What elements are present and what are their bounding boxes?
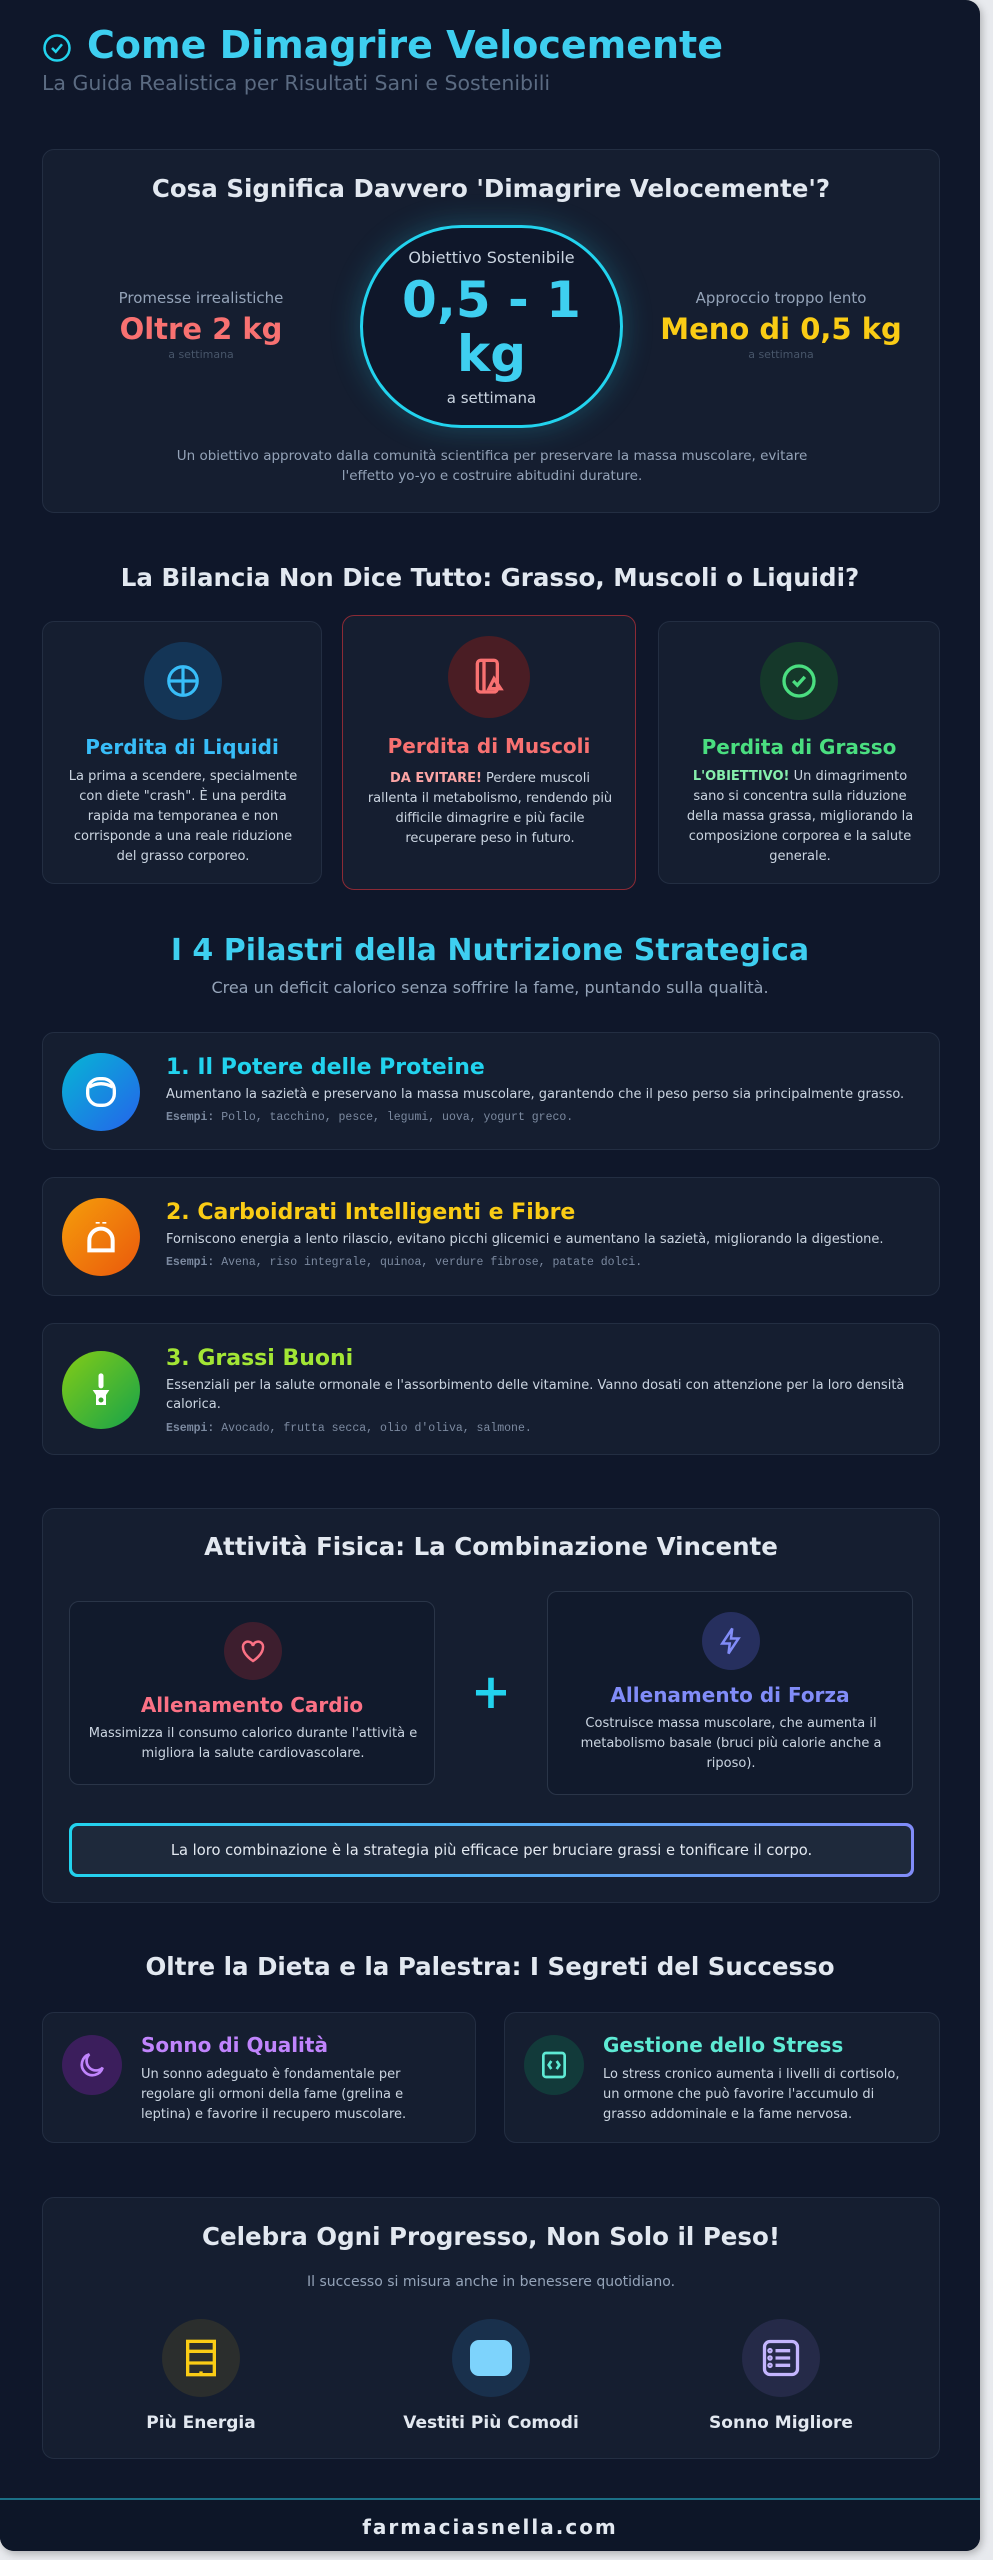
card: stress: Gestione dello Stress: [603, 2033, 843, 2057]
center circle: 0,5 - 1: [402, 271, 581, 329]
panel: celebra: [42, 2197, 940, 2459]
card: proteine: 1. Il Potere delle Proteine: [166, 1055, 485, 1080]
card: liquidi: [42, 621, 322, 884]
card: carboidrati: 2. Carboidrati Intelligenti e Fibre: [166, 1200, 575, 1225]
icon: plus circle: [144, 642, 222, 720]
card: grassi: Essenziali per la salute ormonale e l'assorbimento delle vitamine. Vanno dosati con attenzione per la loro densità calorica.: [166, 1378, 904, 1412]
card: forza: [547, 1591, 913, 1795]
right stat: a settimana: [748, 348, 814, 361]
item: vestiti: [403, 2319, 579, 2433]
icon: egg: [62, 1053, 140, 1131]
card: cardio: Allenamento Cardio: [141, 1693, 363, 1717]
card: muscoli: [342, 615, 636, 890]
icon: bolt: [702, 1612, 760, 1670]
right stat: Meno di 0,5 kg: [660, 312, 902, 346]
card: proteine: [42, 1032, 940, 1150]
panel: obiettivo: [42, 149, 940, 513]
item: vestiti: Vestiti Più Comodi: [403, 2413, 579, 2433]
card: grassi: Esempi: Avocado, frutta secca, olio d'oliva, salmone.: [166, 1422, 532, 1435]
heading: pilastri: I 4 Pilastri della Nutrizione Strategica: [171, 933, 809, 968]
left stat: Promesse irrealistiche: [119, 289, 283, 307]
left stat: [119, 289, 283, 361]
footer: [0, 2498, 980, 2551]
card: grassi: [42, 1323, 940, 1455]
center circle: Obiettivo Sostenibile: [408, 248, 575, 267]
card: cardio: Massimizza il consumo calorico durante l'attività e migliora la salute cardiovascolare.: [89, 1726, 417, 1761]
card: liquidi: Perdita di Liquidi: [85, 735, 279, 759]
card: grasso: Perdita di Grasso: [702, 735, 896, 759]
panel: attività fisica: [42, 1508, 940, 1903]
icon: code: [524, 2035, 584, 2095]
left stat: Oltre 2 kg: [120, 312, 282, 346]
callout: La loro combinazione è la strategia più efficace per bruciare grassi e tonificare il corpo.: [171, 1842, 812, 1858]
card: proteine: Esempi: Pollo, tacchino, pesce, legumi, uova, yogurt greco.: [166, 1111, 573, 1124]
item: sonno: Sonno Migliore: [709, 2413, 853, 2433]
subtitle: pilastri: Crea un deficit calorico senza soffrire la fame, puntando sulla qualità.: [211, 978, 769, 997]
card: proteine: Aumentano la sazietà e preservano la massa muscolare, garantendo che il peso perso sia principalmente grasso.: [166, 1087, 904, 1102]
left stat: a settimana: [168, 348, 234, 361]
subtitle: La Guida Realistica per Risultati Sani e Sostenibili: [42, 71, 550, 95]
card: liquidi: La prima a scendere, specialmente con diete "crash". È una perdita rapida ma temporanea e non corrisponde a una reale riduzione del grasso corporeo.: [69, 769, 297, 864]
right stat: Approccio troppo lento: [696, 289, 866, 307]
card: carboidrati: Forniscono energia a lento rilascio, evitano picchi glicemici e aumentano la sazietà, migliorando la digestione.: [166, 1232, 884, 1247]
card: grassi: 3. Grassi Buoni: [166, 1346, 353, 1371]
heading: Celebra Ogni Progresso, Non Solo il Peso!: [202, 2222, 780, 2251]
icon: phone: [448, 636, 530, 718]
card: forza: Allenamento di Forza: [610, 1683, 850, 1707]
card: muscoli: DA EVITARE! Perdere muscoli rallenta il metabolismo, rendendo più difficile dimagrire e più facile recuperare peso in futuro.: [368, 771, 612, 846]
heading: Attività Fisica: La Combinazione Vincente: [204, 1532, 778, 1561]
footer: farmaciasnella.com: [362, 2515, 618, 2539]
card: sonno: Un sonno adeguato è fondamentale per regolare gli ormoni della fame (grelina e leptina) e favorire il recupero muscolare.: [141, 2067, 406, 2122]
card: sonno: [42, 2012, 476, 2143]
heading: Cosa Significa Davvero 'Dimagrire Velocemente'?: [152, 174, 830, 203]
card: muscoli: Perdita di Muscoli: [388, 734, 590, 758]
card: carboidrati: [42, 1177, 940, 1296]
center circle: kg: [457, 325, 526, 383]
item: energia: Più Energia: [146, 2413, 256, 2433]
card: stress: Lo stress cronico aumenta i livelli di cortisolo, un ormone che può favorire l'accumulo di grasso addominale e la fame nervosa.: [603, 2067, 899, 2122]
center circle: a settimana: [447, 389, 536, 407]
icon: heart: [224, 1622, 282, 1680]
heading: segreti: Oltre la Dieta e la Palestra: I Segreti del Successo: [145, 1952, 835, 1981]
item: energia: [146, 2319, 256, 2433]
note: Un obiettivo approvato dalla comunità scientifica per preservare la massa muscolare, evitare l'effetto yo-yo e costruire abitudini durature.: [177, 448, 807, 484]
center circle: [360, 225, 623, 428]
icon: bottle: [62, 1351, 140, 1429]
icon: check circle: [43, 34, 71, 62]
callout: [69, 1823, 914, 1877]
icon: check: [760, 642, 838, 720]
item: sonno: [709, 2319, 853, 2433]
card: cardio: [69, 1601, 435, 1785]
card: carboidrati: Esempi: Avena, riso integrale, quinoa, verdure fibrose, patate dolci.: [166, 1256, 642, 1269]
right stat: [660, 289, 902, 361]
icon: moon: [62, 2035, 122, 2095]
card: stress: [504, 2012, 940, 2143]
heading: bilancia: La Bilancia Non Dice Tutto: Grasso, Muscoli o Liquidi?: [121, 563, 859, 592]
title: Come Dimagrire Velocemente: [87, 23, 723, 67]
plus: +: [471, 1664, 511, 1720]
icon: bell: [62, 1198, 140, 1276]
card: sonno: Sonno di Qualità: [141, 2033, 328, 2057]
panel: celebra: Il successo si misura anche in benessere quotidiano.: [307, 2274, 675, 2290]
card: grasso: [658, 621, 940, 884]
card: forza: Costruisce massa muscolare, che aumenta il metabolismo basale (bruci più calorie anche a riposo).: [581, 1716, 881, 1771]
card: grasso: L'OBIETTIVO! Un dimagrimento sano si concentra sulla riduzione della massa grassa, migliorando la composizione corporea e la salute generale.: [687, 769, 913, 864]
